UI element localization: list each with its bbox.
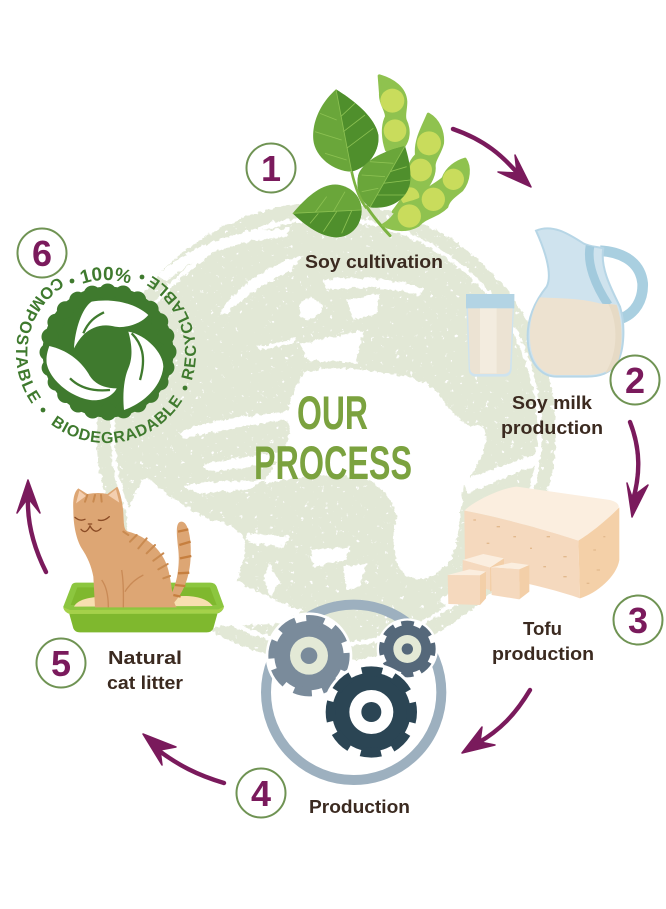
step 6: number badge: 6 [32, 233, 52, 274]
step 1: label: Soy cultivation [305, 251, 443, 272]
arrow: cultivation to milk [453, 129, 531, 187]
step 3: label: production [492, 643, 594, 664]
step 3: number badge [614, 596, 662, 644]
arrow: production to cat litter [143, 734, 224, 783]
step 3: label: Tofu [523, 618, 562, 639]
step 6: compostable seal [16, 266, 196, 444]
step 3: number badge: 3 [628, 600, 648, 641]
step 5: label: Natural [108, 647, 182, 668]
step 2: milk jug and glass icon [466, 228, 643, 377]
title: PROCESS [254, 436, 412, 489]
step 2: number badge [610, 356, 660, 404]
step 5: label: cat litter [107, 672, 183, 693]
step 2: number badge: 2 [625, 360, 645, 401]
step 4: number badge [236, 768, 286, 818]
step 2: label [501, 392, 603, 438]
step 4: gears icon [266, 605, 441, 780]
step 6: compostable seal: BIODEGRADABLE [51, 394, 182, 444]
step 6: number badge [18, 228, 66, 278]
step 2: label: production [501, 417, 603, 438]
step 5: cat in litter box icon [63, 487, 224, 632]
arrow: tofu to production [462, 690, 530, 753]
step 3: tofu icon [448, 487, 619, 605]
step 3: label [492, 618, 594, 664]
step 2: label: Soy milk [512, 392, 593, 413]
step 4: label: Production [309, 796, 410, 817]
arrow: cat litter to packaging [17, 480, 46, 572]
step 5: number badge [36, 638, 86, 688]
step 1: number badge [246, 144, 296, 192]
step 1: soy plant icon [293, 76, 468, 237]
step 5: number badge: 5 [51, 643, 71, 684]
step 5: label [107, 647, 183, 693]
arrow: milk to tofu [627, 422, 648, 517]
step 6: compostable seal: 100% [80, 266, 130, 284]
infographic: our process cycle [16, 74, 664, 818]
step 6: compostable seal: COMPOSTABLE [16, 278, 62, 404]
step 1: number badge: 1 [261, 148, 281, 189]
step 4: number badge: 4 [251, 773, 271, 814]
step 6: compostable seal: RECYCLABLE [146, 276, 196, 380]
globe background [103, 209, 549, 655]
title [254, 386, 412, 489]
title: OUR [297, 386, 368, 439]
